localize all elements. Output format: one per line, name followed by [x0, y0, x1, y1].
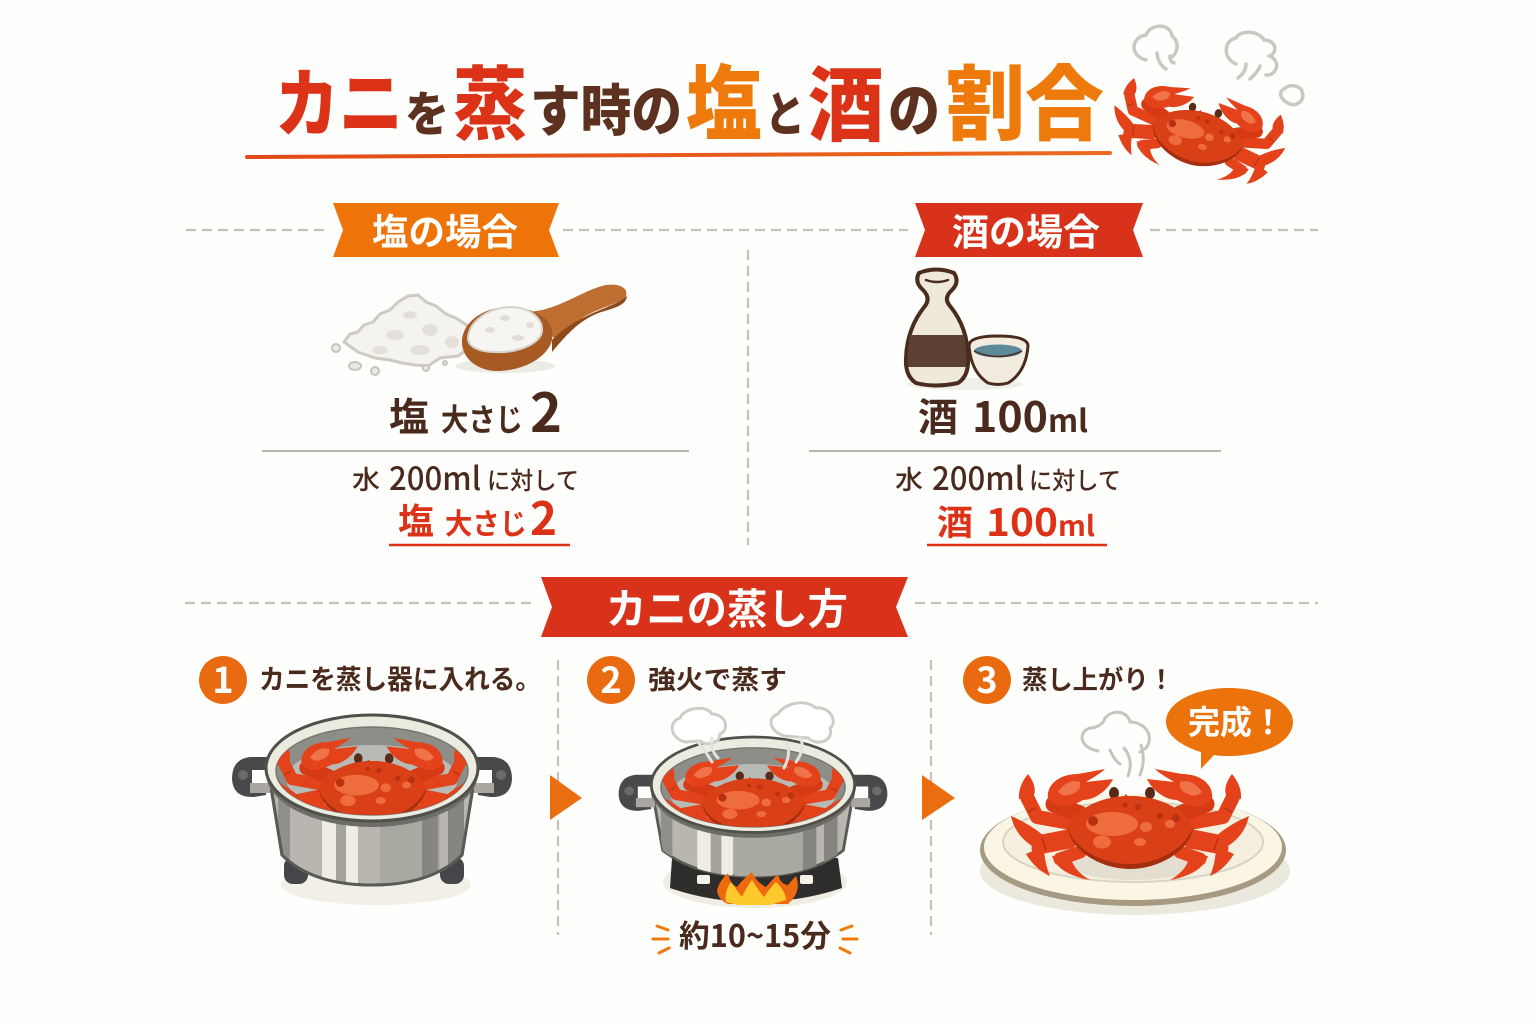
callout: done: [1166, 688, 1293, 769]
ratio text: salt: に対して: [487, 461, 579, 496]
amount: sake: 酒: [918, 387, 958, 443]
step 3 heading: [963, 652, 1174, 704]
icon: steaming pot with crab: [619, 737, 887, 881]
step 2 heading: [587, 652, 787, 704]
ratio text: salt: 塩: [398, 493, 434, 545]
banner: sake heading: [915, 202, 1143, 257]
title: を: [405, 75, 449, 145]
cook time: 約10~15分: [679, 911, 831, 956]
title: の: [888, 64, 940, 148]
ratio text: sake: 100: [986, 492, 1058, 547]
ratio text: salt: 2: [530, 483, 557, 549]
ratio text: sake: に対して: [1029, 461, 1121, 496]
banner: salt heading: [333, 202, 559, 257]
banner: how to steam heading: カニの蒸し方: [606, 576, 848, 637]
step 2 heading: 2: [600, 652, 622, 704]
banner: how to steam heading: [541, 576, 908, 637]
icon: pot with crab: [232, 715, 512, 905]
amount: sake: ml: [1048, 396, 1088, 441]
icon: salt pile and wooden spoon: [332, 285, 627, 375]
step 1 heading: 1: [212, 652, 234, 704]
icon: steam above crab: [1082, 712, 1149, 776]
icon: crab on plate: [980, 769, 1290, 915]
title: 蒸: [453, 41, 527, 157]
banner: salt heading: 塩の場合: [372, 202, 518, 256]
title underline: [247, 153, 1110, 157]
title: と: [765, 75, 805, 145]
amount: sake: [918, 384, 1088, 445]
step 2 heading: 強火で蒸す: [648, 660, 787, 697]
icon: stove with flame: [663, 856, 847, 908]
amount: salt: [389, 369, 562, 448]
step 3 heading: 3: [976, 652, 998, 704]
banner: sake heading: 酒の場合: [952, 202, 1100, 256]
step 3: [963, 652, 1293, 915]
step 2: [587, 652, 887, 956]
ratio text: salt: 200ml: [389, 454, 481, 500]
icon: steam clouds: [672, 703, 833, 768]
icon: sake flask and cup: [906, 270, 1028, 390]
ratio text: salt: [352, 454, 579, 549]
title: カニ: [275, 45, 403, 152]
ratio text: sake: 200ml: [932, 454, 1024, 500]
title: 塩: [686, 38, 762, 157]
panel: salt: [262, 202, 689, 549]
callout: done: 完成！: [1188, 696, 1284, 744]
ratio text: salt: 水: [352, 460, 380, 497]
title: 割合: [946, 38, 1104, 157]
ratio text: sake: ml: [1058, 505, 1095, 545]
step 1 heading: [199, 652, 541, 704]
title: す時の: [530, 67, 682, 148]
amount: salt: 大さじ: [441, 395, 523, 440]
title: [275, 38, 1104, 158]
step 1: [199, 652, 541, 905]
step 1 heading: カニを蒸し器に入れる。: [259, 658, 541, 697]
amount: salt: 塩: [389, 387, 429, 443]
icon: steaming crab: [1103, 26, 1303, 194]
arrow 1: [550, 775, 582, 820]
icon: flame: [717, 872, 798, 905]
amount: sake: 100: [972, 384, 1048, 445]
title: 酒: [808, 39, 884, 158]
ratio text: sake: [895, 454, 1121, 547]
step 3 heading: 蒸し上がり！: [1022, 660, 1174, 697]
ratio text: salt: 大さじ: [445, 501, 527, 543]
ratio text: sake: 水: [895, 460, 923, 497]
panel: sake: [809, 202, 1221, 547]
arrow 2: [922, 775, 955, 820]
ratio text: sake: 酒: [937, 495, 973, 546]
amount: salt: 2: [530, 369, 562, 448]
